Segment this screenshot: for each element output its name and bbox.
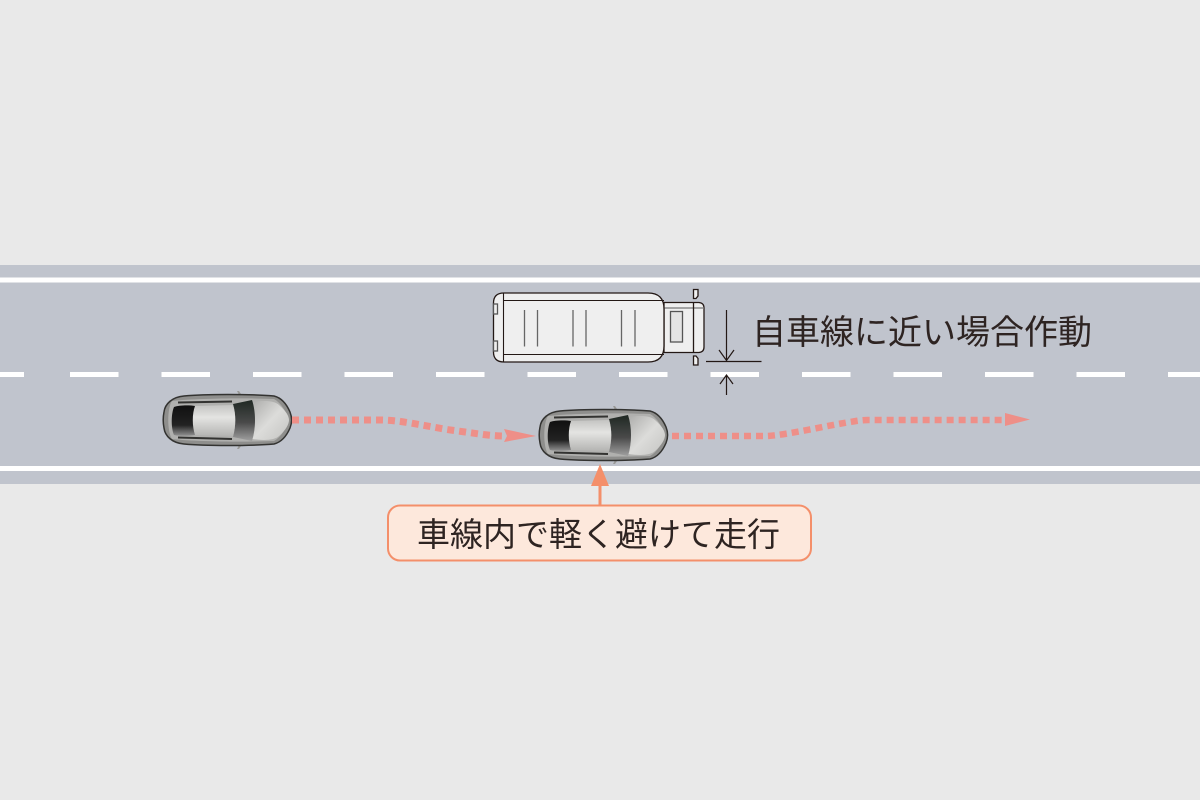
car: left: [163, 391, 292, 449]
callout pointer arrow: [591, 464, 609, 507]
dotted path arrow: return: [672, 413, 1030, 436]
callout: [388, 506, 811, 560]
clearance dimension arrows: [706, 310, 762, 395]
truck: [493, 290, 704, 365]
car: center: [539, 406, 668, 464]
dotted path arrow: approach: [292, 420, 536, 442]
label: close to own lane: 自車線に近い場合作動: [752, 314, 1092, 352]
road: [0, 265, 1200, 484]
callout: 車線内で軽く避けて走行: [417, 516, 780, 553]
